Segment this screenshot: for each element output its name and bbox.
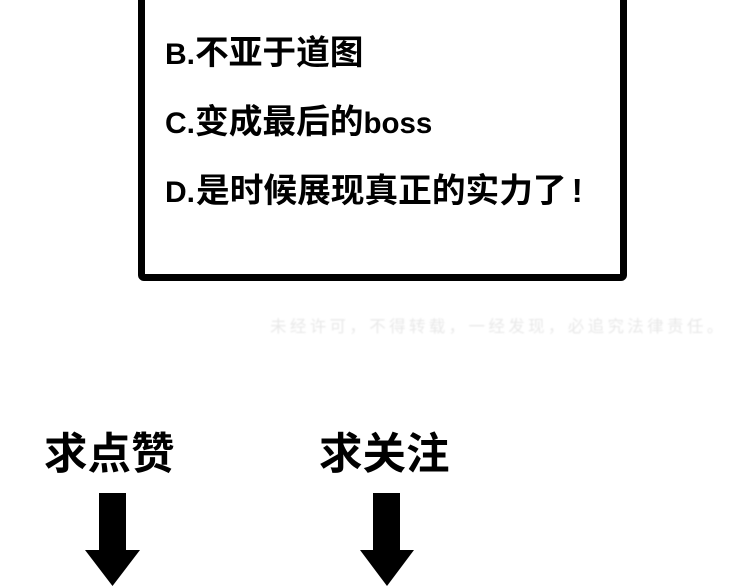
- panel: answer box: [138, 0, 627, 281]
- option C: C.变成最后的boss: [165, 103, 432, 141]
- option B: B.不亚于道图: [165, 34, 363, 72]
- arrow: down to follow: [360, 493, 414, 586]
- option D: D.是时候展现真正的实力了!: [165, 172, 583, 210]
- arrow: down to like: [85, 493, 140, 586]
- heading: request likes: 求点赞: [44, 431, 174, 479]
- watermark text: 未经许可，不得转载，一经发现，必追究法律责任。: [270, 318, 727, 336]
- heading: request follows: 求关注: [319, 431, 450, 479]
